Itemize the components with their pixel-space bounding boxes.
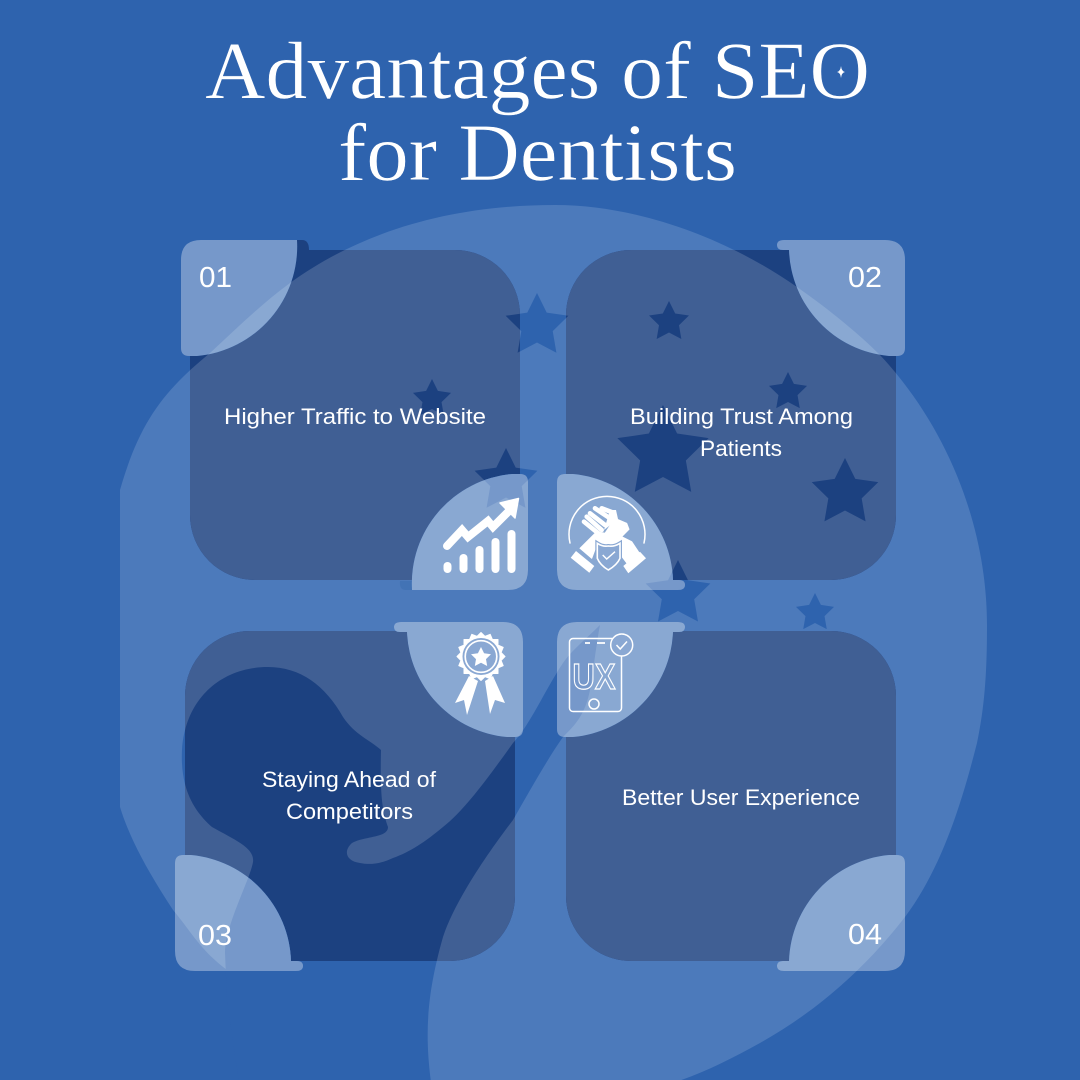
panel: card 1 background <box>190 250 520 580</box>
panel: card 4 background <box>566 631 896 961</box>
icon: rising chart and arrow <box>444 498 518 573</box>
number tag 02: 02 <box>848 262 882 294</box>
text: card 3: Competitors <box>286 799 413 824</box>
text: card 2: Patients <box>700 436 782 461</box>
text: card 4: Better User Experience <box>622 785 860 810</box>
text: card 3: Staying Ahead of <box>262 767 437 792</box>
icon tag 4: UX phone <box>557 622 685 737</box>
panel: card 2 background <box>566 250 896 580</box>
icon tag 2: handshake <box>557 474 685 590</box>
title: for Dentists <box>338 107 737 198</box>
number tag 01: 01 <box>199 262 232 294</box>
panel: card 3 background <box>185 631 515 961</box>
text: card 1: Higher Traffic to Website <box>224 404 486 429</box>
text: card 2: Building Trust Among <box>630 404 853 429</box>
number tag 03: 03 <box>198 920 232 952</box>
icon tag 3: award <box>394 622 523 737</box>
title: Advantages of SEO <box>205 25 870 116</box>
text: card 3 <box>262 767 437 824</box>
title <box>205 25 870 198</box>
icon: phone with UX and check badge <box>570 634 633 712</box>
number tag 04: 04 <box>848 919 882 951</box>
icon tag 1: growth chart <box>412 474 528 590</box>
icon: handshake with shield <box>569 496 646 573</box>
text: card 2 <box>630 404 853 461</box>
icon: award badge with ribbons <box>455 632 505 715</box>
icon: phone with UX and check badge: UX <box>572 656 616 697</box>
